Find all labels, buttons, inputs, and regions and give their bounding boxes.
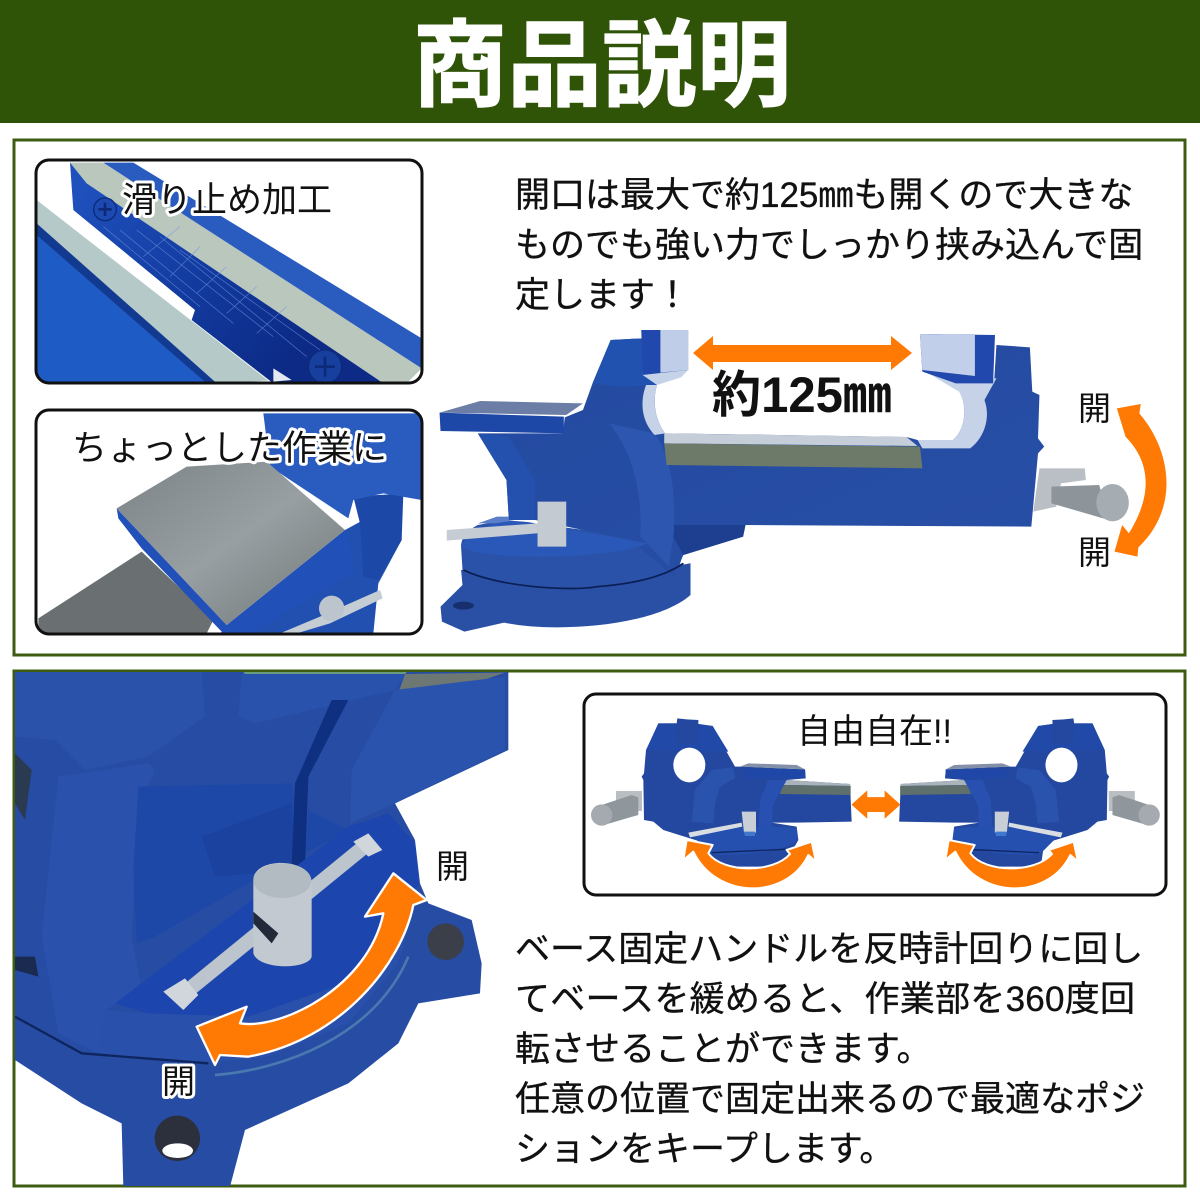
panel: small work anvil photo xyxy=(36,410,422,634)
text block: opening description: 開口は最大で約125㎜も開くので大きな xyxy=(515,176,1133,215)
arrow: left rotation xyxy=(683,840,816,888)
caption: anti-slip: 滑り止め加工 xyxy=(122,181,332,220)
label: open bottom: 開 xyxy=(1078,534,1111,571)
title band xyxy=(0,0,1200,123)
panel: bottom frame xyxy=(14,671,1185,1186)
text block: swivel description: 任意の位置で固定出来るので最適なポジ xyxy=(515,1080,1145,1119)
text block: opening description xyxy=(515,176,1143,315)
text block: swivel description: てベースを緩めると、作業部を360度回 xyxy=(515,980,1135,1019)
label: opening width: 約125㎜ xyxy=(712,367,892,423)
arrow: right rotation xyxy=(945,840,1078,888)
panel: top frame xyxy=(14,140,1185,655)
title: 商品説明 xyxy=(413,13,791,118)
text block: swivel description: ベース固定ハンドルを反時計回りに回し xyxy=(515,930,1143,969)
photo: vise side view xyxy=(440,330,1129,632)
caption: small work: ちょっとした作業に xyxy=(72,429,387,468)
label: open left: 開 xyxy=(162,1063,195,1100)
label: open top: 開 xyxy=(1078,390,1111,427)
text block: opening description: 定します！ xyxy=(515,276,690,315)
vise: left view xyxy=(591,718,852,867)
text block: opening description: ものでも強い力でしっかり挟み込んで固 xyxy=(515,226,1143,265)
label: open right: 開 xyxy=(436,848,469,885)
arrow: handle rotation xyxy=(1114,404,1166,557)
panel: anti-slip jaw photo xyxy=(36,160,422,383)
arrow: jaw opening width xyxy=(693,336,912,370)
text block: swivel description: ションをキープします。 xyxy=(515,1130,894,1169)
panel: swivel demonstration xyxy=(584,694,1166,895)
text block: swivel description xyxy=(515,930,1145,1169)
arrow: swap xyxy=(851,790,900,819)
text block: swivel description: 転させることができます。 xyxy=(515,1030,932,1069)
photo: swivel base close-up xyxy=(15,670,508,1187)
vise: right view xyxy=(899,718,1160,867)
caption: freely: 自由自在!! xyxy=(797,713,952,751)
